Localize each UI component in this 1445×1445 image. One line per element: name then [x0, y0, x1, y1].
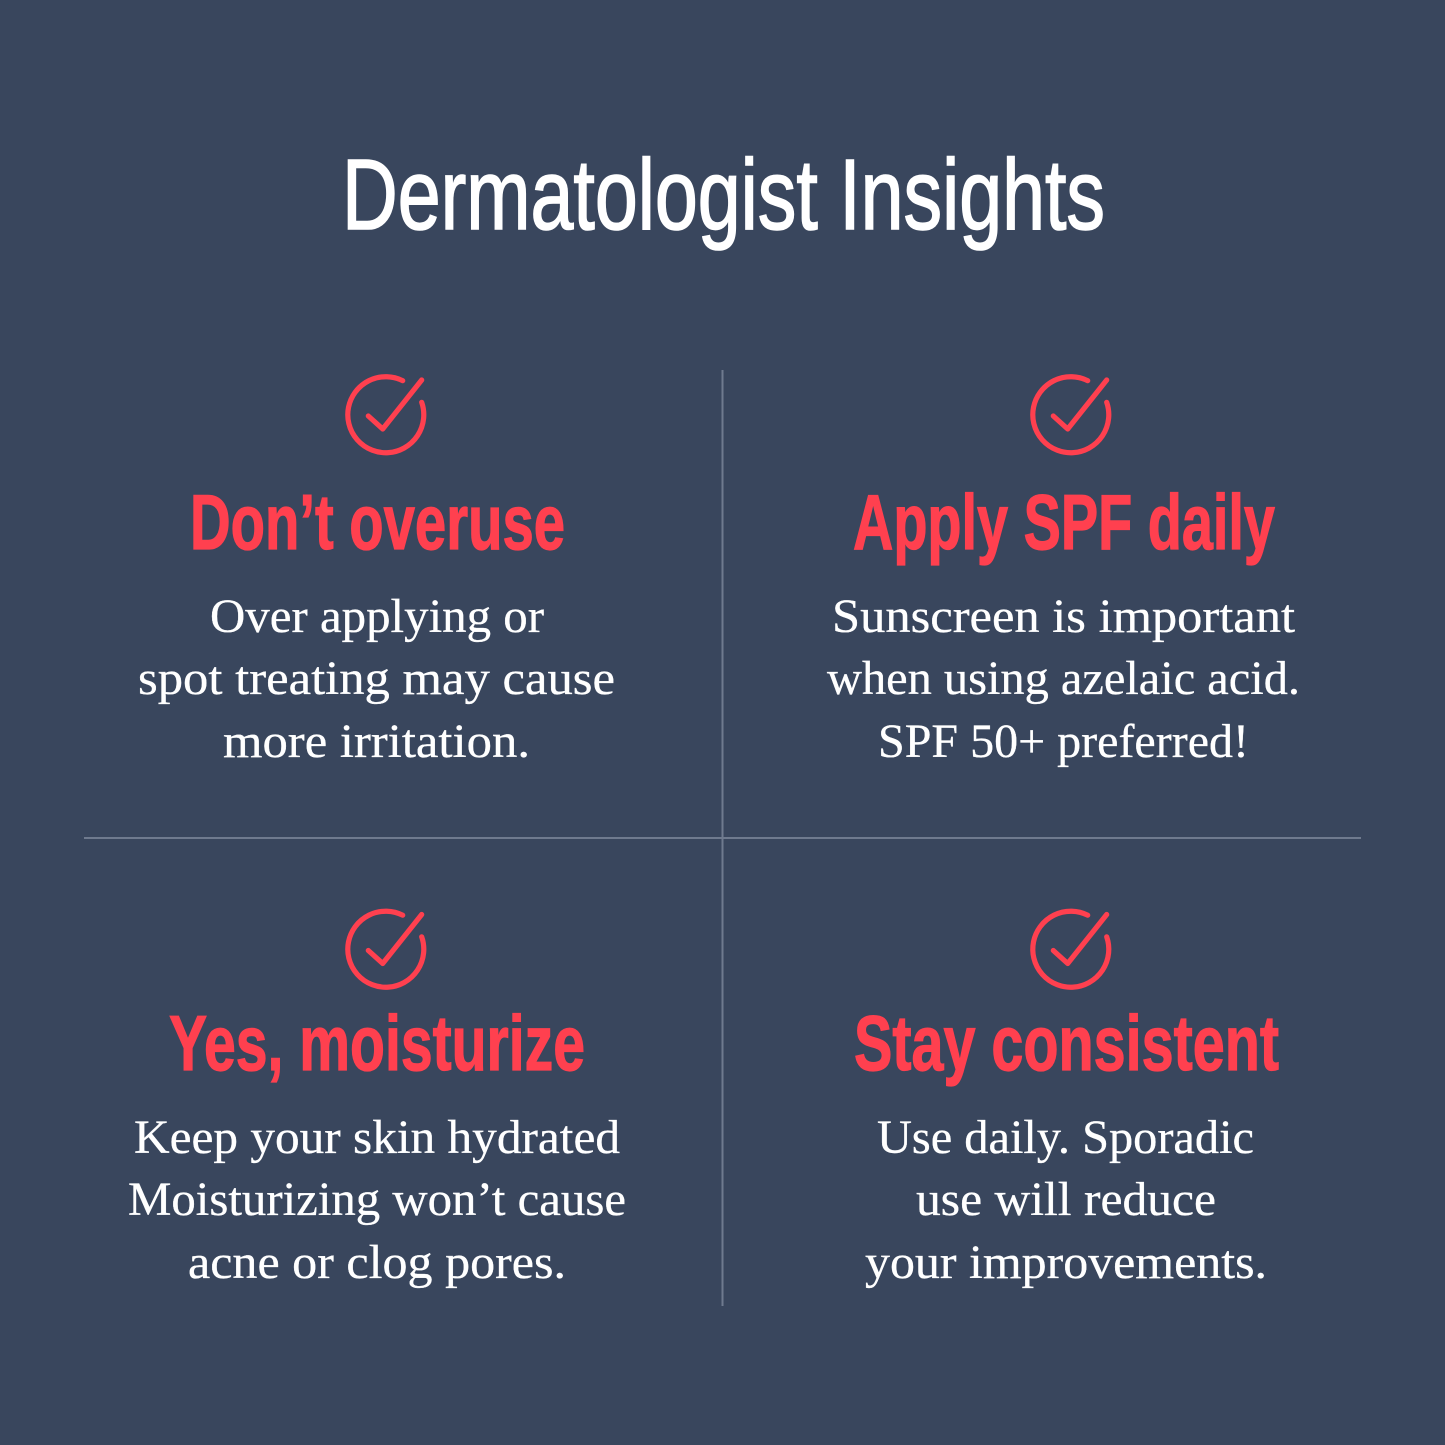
icon: check circle — [1033, 377, 1109, 453]
panel: yes, moisturize — [128, 911, 626, 1289]
text block: yes, moisturize: Keep your skin hydrated — [134, 1111, 620, 1164]
title: Dermatologist Insights — [342, 139, 1105, 251]
text block: stay consistent: Use daily. Sporadic — [877, 1111, 1254, 1164]
text block: apply SPF daily — [827, 590, 1300, 768]
heading: stay consistent: Stay consistent — [854, 999, 1279, 1087]
text block: apply SPF daily: Sunscreen is important — [832, 590, 1296, 643]
heading: apply SPF daily: Apply SPF daily — [853, 478, 1275, 566]
heading: yes, moisturize: Yes, moisturize — [169, 999, 585, 1087]
panel: stay consistent — [854, 911, 1279, 1289]
text block: yes, moisturize — [128, 1111, 626, 1289]
icon: check circle — [348, 911, 424, 987]
text block: apply SPF daily: when using azelaic acid. — [827, 652, 1300, 705]
text block: yes, moisturize: Moisturizing won’t cause — [128, 1173, 626, 1226]
text block: don't overuse: spot treating may cause — [138, 652, 615, 705]
text block: stay consistent: use will reduce — [916, 1173, 1216, 1226]
text block: don't overuse: more irritation. — [223, 715, 530, 768]
text block: don't overuse — [138, 590, 615, 768]
text block: stay consistent — [865, 1111, 1267, 1289]
panel: don't overuse — [138, 377, 615, 768]
text block: stay consistent: your improvements. — [865, 1236, 1267, 1289]
icon: check circle — [348, 377, 424, 453]
heading: don't overuse: Don’t overuse — [190, 478, 565, 566]
panel: apply SPF daily — [827, 377, 1300, 768]
text block: apply SPF daily: SPF 50+ preferred! — [878, 715, 1249, 768]
text block: yes, moisturize: acne or clog pores. — [188, 1236, 566, 1289]
icon: check circle — [1033, 911, 1109, 987]
text block: don't overuse: Over applying or — [210, 590, 544, 643]
